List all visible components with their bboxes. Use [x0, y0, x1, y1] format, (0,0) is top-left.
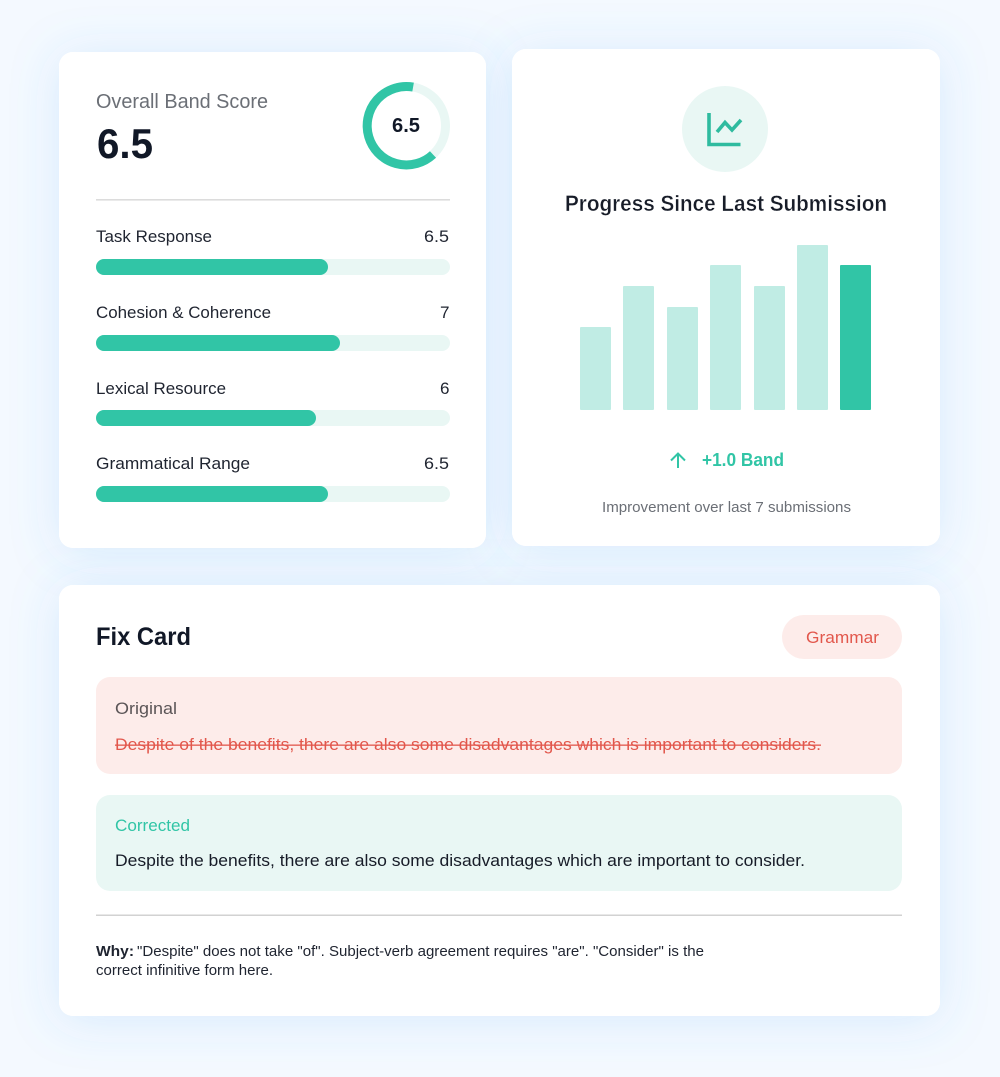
- overall score value: 6.5: [97, 120, 153, 167]
- row: grammatical range: [96, 454, 450, 502]
- label: overall band score: Overall Band Score: [96, 91, 268, 113]
- text block: explanation: [96, 944, 704, 979]
- panel: fix card: [59, 585, 940, 1016]
- chart: score ring: [367, 86, 445, 165]
- box: original sentence: Original: [115, 699, 177, 718]
- chart: score ring: 6.5: [392, 115, 420, 137]
- badge: grammar: Grammar: [806, 628, 879, 647]
- row: grammatical range: Grammatical Range: [96, 454, 250, 473]
- row: lexical resource: 6: [440, 379, 450, 398]
- row: cohesion and coherence: 7: [440, 303, 450, 322]
- row: cohesion and coherence: [96, 303, 450, 351]
- row: task response: 6.5: [424, 227, 449, 246]
- badge: grammar: [782, 615, 902, 659]
- row: grammatical range: 6.5: [424, 454, 449, 473]
- row: lexical resource: [96, 379, 450, 426]
- heading: progress: Progress Since Last Submission: [565, 191, 887, 216]
- panel: overall band score: [59, 52, 486, 548]
- bar chart: submissions: [580, 245, 871, 410]
- text block: explanation: Why:: [96, 944, 134, 960]
- row: lexical resource: Lexical Resource: [96, 379, 226, 398]
- text block: explanation: correct infinitive form here.: [96, 963, 273, 979]
- row: task response: [96, 227, 450, 275]
- caption: improvement: Improvement over last 7 submissions: [602, 499, 851, 516]
- box: corrected sentence: Despite the benefits, there are also some disadvantages which are important to consider.: [115, 851, 805, 870]
- stat: band improvement: +1.0 Band: [702, 450, 784, 470]
- icon: up arrow: [671, 454, 685, 468]
- box: original sentence: Despite of the benefits, there are also some disadvantages which is important to considers.: [115, 735, 821, 754]
- text block: explanation: "Despite" does not take "of". Subject-verb agreement requires "are". "Consider" is the: [137, 944, 704, 960]
- box: original sentence: [96, 677, 902, 774]
- box: corrected sentence: Corrected: [115, 816, 190, 835]
- row: cohesion and coherence: Cohesion & Coherence: [96, 303, 271, 322]
- box: corrected sentence: [96, 795, 902, 891]
- panel: progress: [512, 49, 940, 546]
- heading: fix card: Fix Card: [96, 623, 191, 651]
- row: task response: Task Response: [96, 227, 212, 246]
- icon: line chart: [682, 86, 768, 172]
